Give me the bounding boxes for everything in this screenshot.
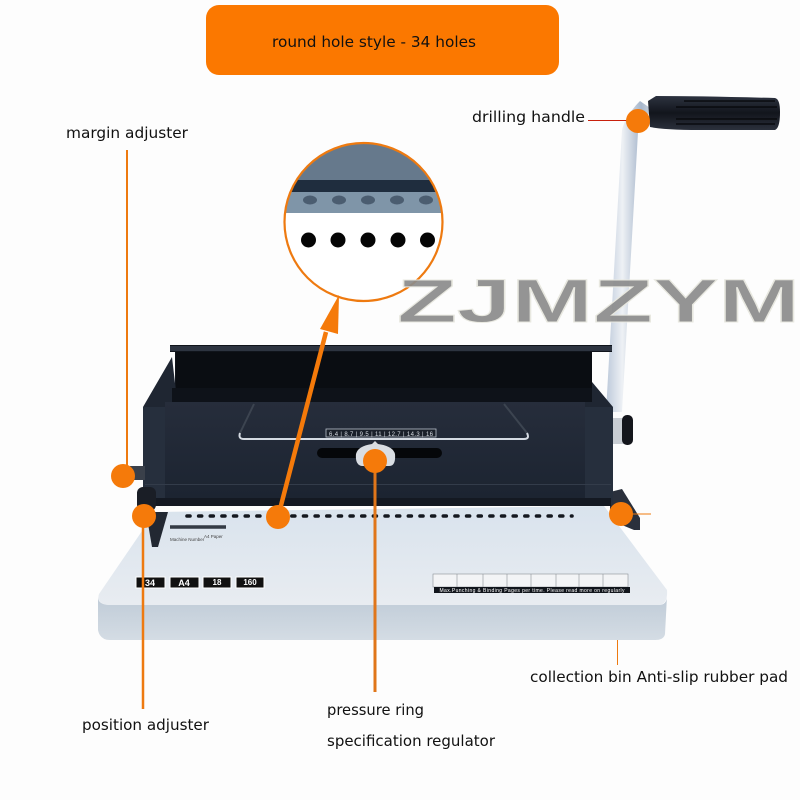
- left margin screw: [130, 466, 145, 480]
- spec badges: [136, 577, 264, 588]
- callout: collection bin and anti-slip rubber pad: collection bin Anti-slip rubber pad: [530, 668, 788, 686]
- left position knob: [137, 487, 156, 511]
- arrow: holes to magnifier: [266, 295, 339, 529]
- base front face: [98, 596, 667, 640]
- adjuster slot: [317, 448, 442, 458]
- callout: drilling handle: drilling handle: [472, 108, 585, 126]
- chrome wire handle: [240, 404, 528, 439]
- machine illustration: [98, 96, 780, 640]
- handle pole: [606, 101, 653, 412]
- spec badges: 34: [145, 578, 155, 588]
- callout: pressure ring and specification regulator: specification regulator: [327, 732, 496, 750]
- spec badges: 160: [243, 578, 257, 587]
- scale plate: 6.4 | 8.7 | 9.5 | 11 | 12.7 | 14.3 | 16: [329, 432, 434, 438]
- front panel: [165, 402, 585, 498]
- spec table: [433, 574, 630, 594]
- dark machine body: [143, 357, 613, 506]
- right paper stop: [610, 489, 640, 530]
- pressure ring knob: [356, 441, 395, 466]
- magnifier callout: [284, 143, 444, 301]
- spec table: Max.Punching & Binding Pages per time. Please read more on regularly: [440, 588, 625, 594]
- scale plate: [326, 429, 436, 438]
- guide slot: [170, 527, 226, 542]
- handle grip: [648, 96, 780, 130]
- guide slot: A4 Paper: [204, 534, 223, 539]
- callout: position adjuster: [82, 504, 210, 734]
- callout: drilling handle: [472, 108, 650, 133]
- top tray: [176, 352, 592, 394]
- callout: right marker: [609, 502, 651, 526]
- watermark: ZJMZYM: ZJMZYM: [397, 267, 800, 335]
- spec badges: A4: [178, 578, 190, 588]
- callout: margin adjuster: margin adjuster: [66, 124, 189, 142]
- banner: round hole style: round hole style - 34 holes: [272, 33, 476, 51]
- punched holes row: [187, 514, 572, 518]
- spec badges: 18: [213, 578, 222, 587]
- callout: pressure ring and specification regulator: [327, 449, 496, 750]
- callout: pressure ring and specification regulator: pressure ring: [327, 701, 424, 719]
- left paper guide: [146, 512, 168, 547]
- base top surface: [98, 506, 667, 605]
- dark back lid: [170, 345, 612, 392]
- callout: position adjuster: position adjuster: [82, 716, 210, 734]
- banner: round hole style: [206, 5, 559, 75]
- guide slot: Machine Number: [170, 537, 205, 542]
- callout: margin adjuster: [66, 124, 189, 488]
- magnified holes: [301, 232, 435, 248]
- handle pivot knob: [612, 415, 633, 445]
